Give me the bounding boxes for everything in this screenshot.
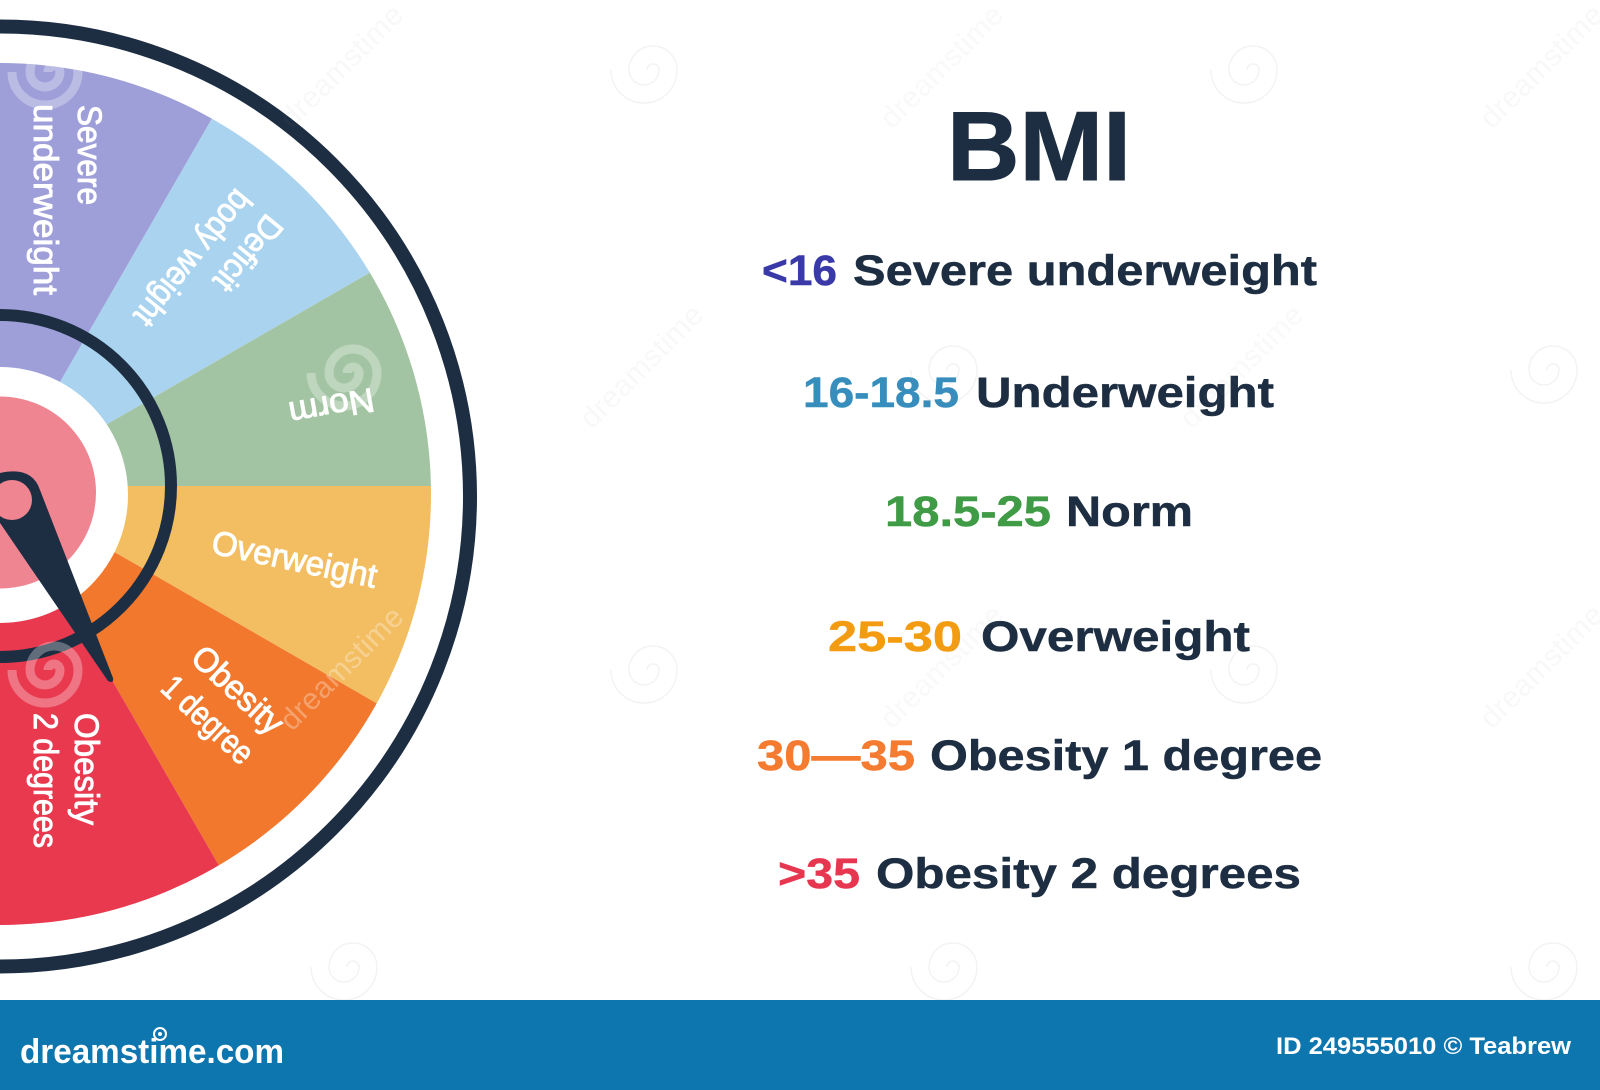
segment: obesity 1 degree (80, 552, 377, 866)
segment: obesity 2 degrees (0, 608, 219, 925)
text: dreamstime (874, 598, 1010, 735)
label: Deficit body weight: body weight (126, 182, 259, 334)
label: Obesity 1 degree (154, 638, 291, 772)
outer ring (0, 26, 470, 966)
label: Obesity 2 degrees (26, 713, 105, 848)
list row: severe underweight: <16 (762, 247, 837, 295)
wheel segments (0, 63, 431, 925)
label: Obesity 1 degree: 1 degree (154, 668, 261, 772)
list row: underweight: 16-18.5 (803, 369, 959, 417)
list row: norm: 18.5-25 (885, 488, 1051, 536)
text: dreamstime (274, 600, 410, 737)
list row: obesity 2 degrees: >35 (778, 850, 860, 898)
segment: deficit body weight (60, 118, 370, 424)
text: dreamstime (1174, 298, 1310, 435)
list row: underweight (803, 369, 1274, 417)
label: Severe underweight (26, 104, 108, 296)
footer logo: dreamstime.com (20, 1033, 284, 1071)
label: Deficit body weight: Deficit (205, 207, 290, 300)
white hub (0, 367, 128, 623)
segment: overweight (114, 486, 431, 704)
label: Obesity 1 degree: Obesity (184, 638, 291, 742)
text: dreamstime (274, 0, 410, 135)
text: dreamstime (574, 298, 710, 435)
label: Severe underweight: underweight (26, 104, 64, 296)
list row: norm (885, 488, 1193, 536)
BMI gauge wheel (0, 20, 477, 974)
pink hub centre (0, 396, 96, 588)
list row: overweight (828, 613, 1250, 661)
list row: norm: Norm (1066, 488, 1193, 536)
segment: norm (106, 272, 431, 486)
label: Severe underweight: Severe (70, 105, 108, 205)
footer credit: ID 249555010 © Teabrew (1276, 1033, 1571, 1060)
list row: overweight: Overweight (981, 613, 1250, 661)
list row: obesity 1 degree (757, 732, 1322, 780)
list row: obesity 2 degrees: Obesity 2 degrees (876, 850, 1301, 898)
segment: severe underweight (0, 63, 212, 382)
list row: severe underweight: Severe underweight (853, 247, 1317, 295)
list row: obesity 1 degree: Obesity 1 degree (930, 732, 1322, 780)
text: dreamstime (874, 0, 1010, 135)
needle (0, 471, 113, 682)
list row: obesity 1 degree: 30—35 (757, 732, 915, 780)
label: Norm: Norm (286, 380, 377, 432)
title: BMI (947, 91, 1131, 201)
list row: overweight: 25-30 (828, 613, 962, 661)
label: Obesity 2 degrees: 2 degrees (26, 713, 64, 848)
list row: underweight: Underweight (976, 369, 1274, 417)
inner dial ring (0, 315, 171, 657)
label: Overweight: Overweight (208, 524, 381, 596)
label: Obesity 2 degrees: Obesity (67, 713, 105, 825)
footer bar (0, 1000, 1600, 1090)
